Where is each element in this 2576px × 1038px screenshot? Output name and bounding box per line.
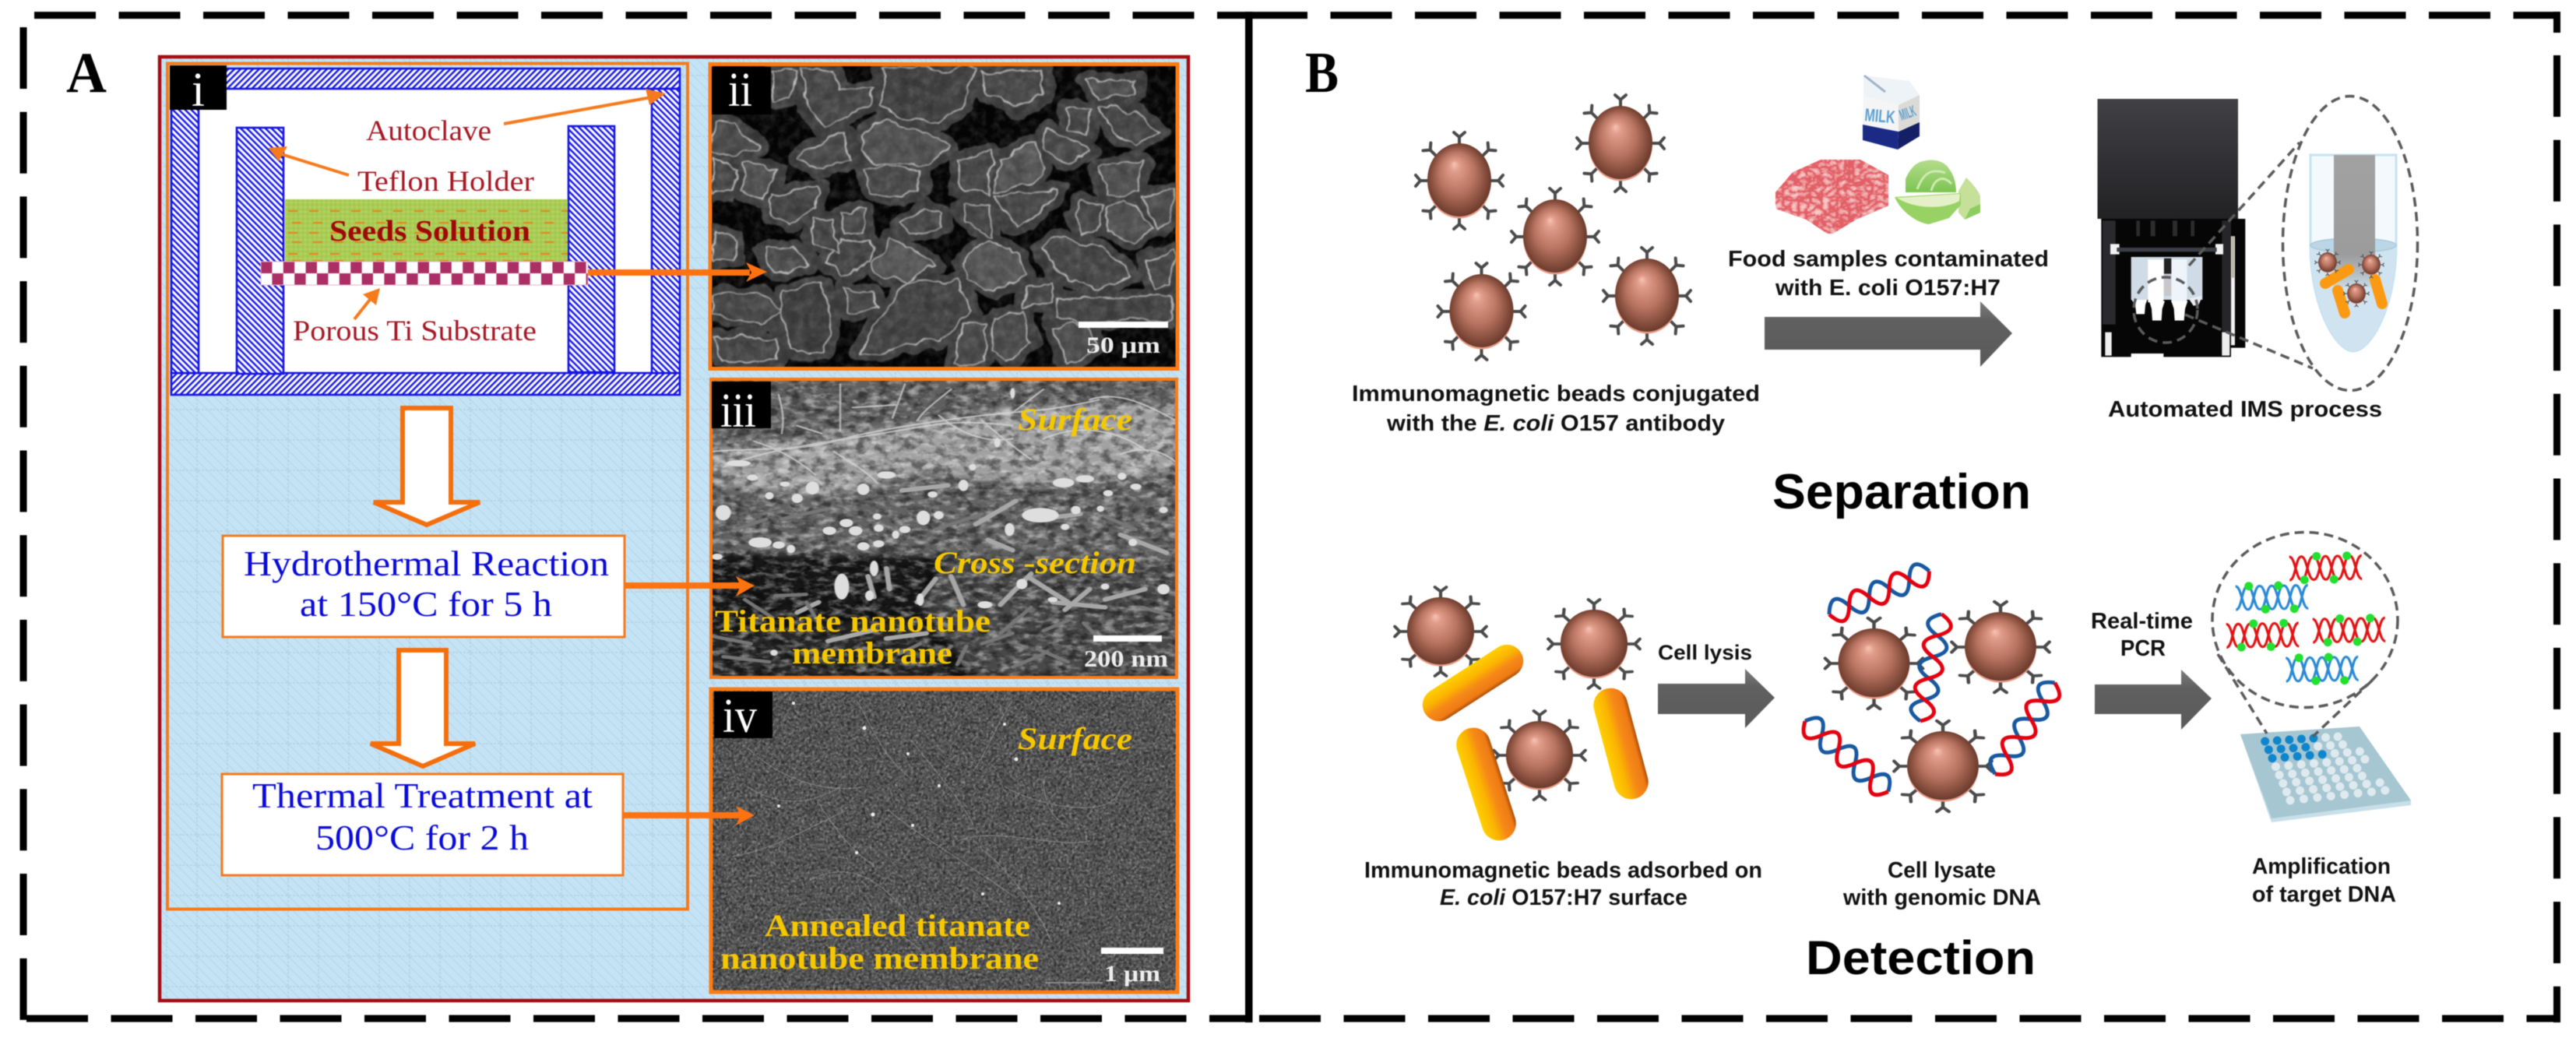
caption: beads adsorbed: Immunomagnetic beads adsorbed on — [1364, 858, 1762, 883]
caption: cell lysate — [1842, 858, 2041, 910]
scale bar 50 um — [1079, 322, 1168, 358]
label: real-time PCR: Real-time — [2091, 609, 2193, 634]
scale bar 200 nm: 200 nm — [1084, 645, 1168, 672]
sub-panel label iii — [712, 382, 771, 438]
sub-panel iii: SEM of titanate nanotube membrane — [705, 374, 1188, 680]
process box: thermal treatment — [222, 774, 623, 875]
down arrow 1 — [374, 408, 480, 525]
teflon holder right — [568, 126, 614, 372]
arrow to teflon holder — [268, 146, 349, 175]
label titanate nanotube membrane: membrane — [792, 635, 952, 670]
label: real-time PCR — [2091, 609, 2193, 661]
teflon holder left — [237, 128, 283, 374]
heading: detection: Detection — [1806, 931, 2036, 984]
seeds solution: Seeds Solution — [329, 215, 530, 248]
scale bar 200 nm — [1084, 635, 1168, 672]
label porous Ti substrate: Porous Ti Substrate — [293, 315, 537, 347]
panel B: detection row — [1364, 533, 2411, 984]
sub-panel label ii — [712, 64, 771, 117]
panel B: separation row — [1352, 76, 2417, 519]
process box: hydrothermal reaction: at 150°C for 5 h — [300, 584, 552, 624]
sub-panel label iii: iii — [720, 385, 756, 438]
arrow: food samples to IMS — [1765, 301, 2012, 367]
icon: milk carton — [1863, 76, 1920, 150]
label annealed titanate nanotube membrane: Annealed titanate — [765, 908, 1030, 943]
arrow from hydrothermal box to sub-panel iii — [625, 576, 755, 596]
label surface: Surface — [1018, 721, 1132, 756]
arrow to autoclave — [504, 89, 666, 124]
down arrow 2 — [371, 650, 475, 766]
icon: ground meat — [1775, 160, 1888, 234]
caption: immunomagnetic beads conjugated — [1352, 382, 1760, 436]
caption: food samples: with E. coli O157:H7 — [1775, 276, 2001, 301]
caption: immunomagnetic beads conjugated: with the E. coli O157 antibody — [1386, 411, 1725, 436]
caption: amplification of target DNA: Amplification — [2252, 854, 2391, 879]
scale bar 50 um: 50 μm — [1086, 333, 1160, 358]
icon: cabbage — [1895, 160, 1980, 224]
caption: food samples — [1728, 247, 2049, 301]
caption: automated IMS process: Automated IMS process — [2108, 397, 2382, 422]
panel A: fabrication of titanate nanotube membrane — [160, 57, 1188, 1001]
label cross-section: Cross -section — [934, 545, 1136, 580]
label: real-time PCR: PCR — [2120, 636, 2166, 661]
sub-panel label iv: iv — [723, 690, 757, 743]
label titanate nanotube membrane: Titanate nanotube — [715, 603, 991, 639]
icon: PCR plate — [2240, 727, 2411, 822]
caption: beads adsorbed: E. coli O157:H7 surface — [1440, 885, 1687, 910]
icon: magnified tube — [2283, 97, 2417, 391]
arrow: cell lysis — [1658, 669, 1775, 728]
orange frame for sub-panel i — [167, 64, 688, 910]
sub-panel iv: SEM of annealed membrane — [711, 689, 1177, 992]
arrow to substrate — [354, 288, 380, 319]
label surface: Surface — [1018, 402, 1132, 437]
caption: immunomagnetic beads conjugated: Immunomagnetic beads conjugated — [1352, 382, 1760, 406]
label annealed titanate nanotube membrane — [720, 908, 1039, 976]
sub-panel label iv — [714, 690, 772, 743]
caption: food samples: Food samples contaminated — [1728, 247, 2049, 272]
caption: beads adsorbed — [1364, 858, 1762, 910]
icon: milk carton: MILK — [1864, 104, 1896, 127]
sub-panel label i: i — [192, 64, 205, 117]
seeds solution — [285, 199, 568, 262]
arrow from substrate to sub-panel ii — [588, 262, 767, 282]
sub-panel ii: SEM of porous Ti substrate — [710, 64, 1177, 369]
process box: thermal treatment: 500°C for 2 h — [315, 818, 529, 857]
arrow from thermal box to sub-panel iv — [624, 806, 755, 825]
panel label B: B — [1305, 41, 1339, 105]
caption: amplification of target DNA — [2252, 854, 2396, 907]
label: cell lysis: Cell lysis — [1658, 641, 1752, 664]
icon: magnified DNA amplification — [2212, 533, 2398, 737]
sub-panel i: autoclave schematic and process flow — [167, 64, 688, 910]
label autoclave: Autoclave — [366, 115, 491, 147]
immunomagnetic beads — [1416, 95, 1691, 360]
caption: cell lysate: with genomic DNA — [1842, 885, 2041, 910]
icon: automated IMS instrument — [2098, 99, 2313, 368]
scale bar 1 um: 1 μm — [1104, 961, 1160, 987]
label teflon holder: Teflon Holder — [357, 166, 534, 198]
process box: thermal treatment: Thermal Treatment at — [252, 776, 593, 815]
panel label A: A — [66, 41, 107, 105]
autoclave vessel — [171, 69, 680, 395]
caption: cell lysate: Cell lysate — [1888, 858, 1996, 883]
icon: milk carton: MILK — [1897, 103, 1919, 125]
label annealed titanate nanotube membrane: nanotube membrane — [720, 941, 1039, 976]
label titanate nanotube membrane — [715, 603, 991, 670]
heading: separation: Separation — [1772, 465, 2031, 519]
arrow: real-time PCR — [2095, 670, 2212, 730]
porous Ti substrate — [261, 262, 588, 285]
cell lysate with DNA strands — [1797, 561, 2064, 811]
scale bar 1 um — [1045, 948, 1163, 987]
beads adsorbed on E. coli rods — [1395, 587, 1652, 845]
sub-panel label ii: ii — [728, 64, 752, 117]
panel A background frame — [160, 57, 1188, 1001]
process box: hydrothermal reaction: Hydrothermal Reaction — [244, 544, 609, 583]
process box: hydrothermal reaction — [223, 536, 625, 637]
caption: amplification of target DNA: of target DNA — [2252, 882, 2396, 907]
sub-panel label i — [170, 64, 227, 117]
